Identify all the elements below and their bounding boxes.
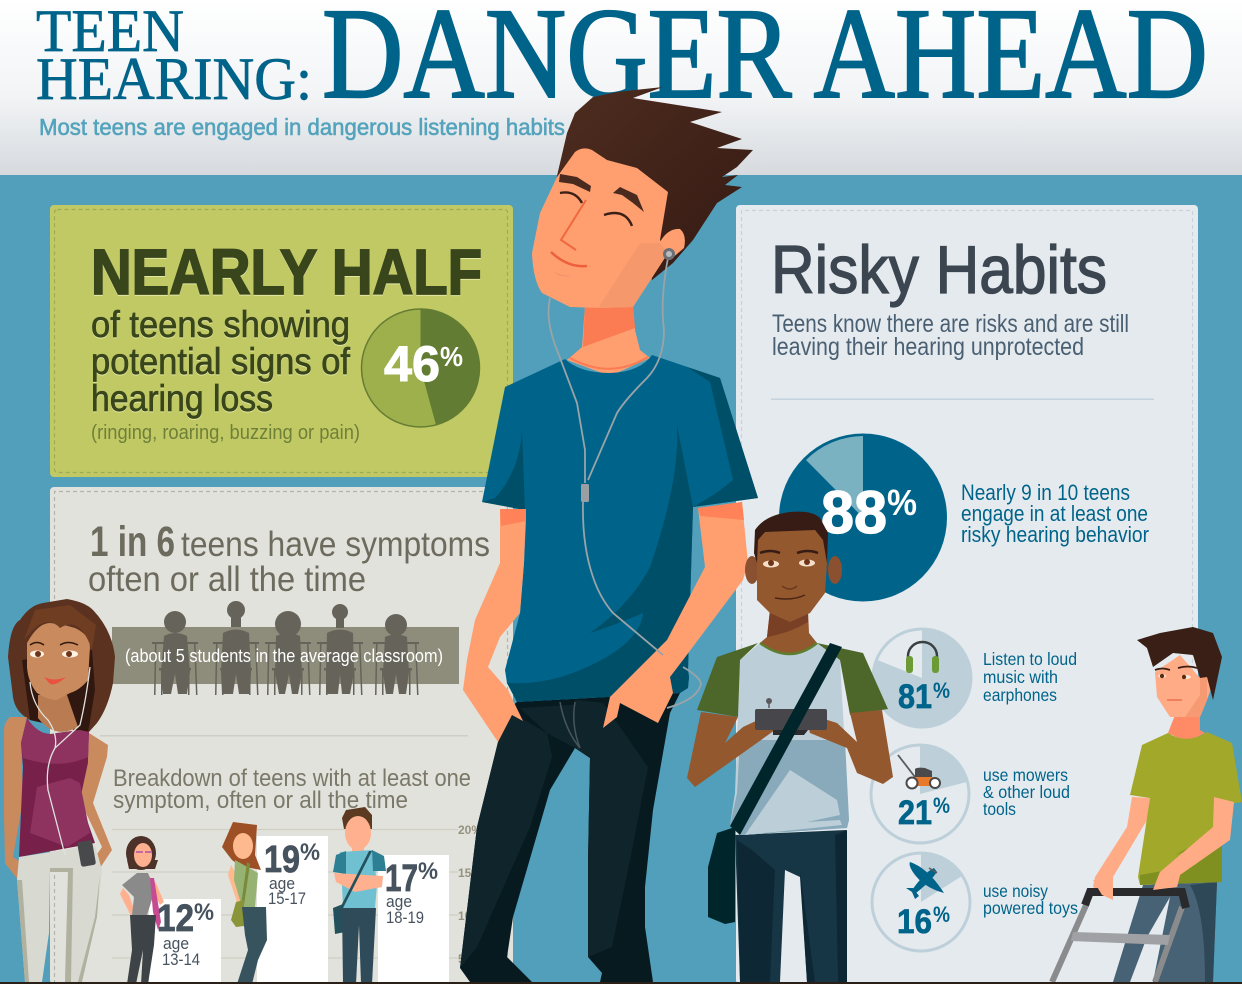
stat: 81 percent earphones: %: [933, 678, 950, 703]
facial features: [551, 174, 644, 276]
purple top: [19, 718, 95, 857]
stat: 81 percent earphones: earphones: [983, 685, 1057, 705]
text: signs of hearing loss: potential signs of: [91, 341, 351, 382]
ears and neck: [745, 556, 759, 584]
label: age 13-14: %: [194, 899, 214, 926]
facial features: [760, 551, 818, 599]
stat: 81 percent earphones: 81: [898, 678, 932, 716]
text: risks intro: [772, 310, 1129, 361]
phone: [77, 840, 96, 867]
text: nearly 9 in 10: Nearly 9 in 10 teens: [961, 480, 1130, 505]
heading: 1 in 6: often or all the time: [88, 560, 366, 599]
pants: [17, 845, 102, 982]
header band: [0, 0, 1242, 175]
text: nearly 9 in 10: risky hearing behavior: [961, 522, 1149, 547]
left arm: [1093, 797, 1150, 900]
text: risks intro: leaving their hearing unprotected: [772, 333, 1084, 361]
bar chart: symptoms by age: 20%: [458, 823, 482, 837]
ear: [660, 229, 685, 260]
panel: 1 in 6 teens: [50, 487, 513, 984]
label: age 18-19: 17: [385, 858, 418, 900]
heading: breakdown: [113, 765, 471, 814]
t-shirt: [730, 643, 849, 835]
stat: 21 percent mowers: %: [933, 793, 950, 818]
pants: [735, 830, 847, 982]
note: symptoms: (ringing, roaring, buzzing or pain): [91, 422, 360, 444]
text: risks intro: Teens know there are risks and are still: [772, 310, 1129, 338]
facial features: [1155, 666, 1197, 700]
stat: 16 percent toys: use noisy: [983, 881, 1048, 901]
t-shirt: [1130, 732, 1242, 885]
label: age 13-14: 13-14: [162, 950, 200, 969]
pie chart: 88 percent: 88: [821, 479, 887, 546]
icon: lawn mower: [898, 755, 940, 788]
stat: 21 percent mowers: tools: [983, 799, 1016, 819]
hair back: [553, 87, 753, 280]
neck: [567, 305, 650, 376]
hair: [1137, 627, 1222, 700]
label: age 15-17: [264, 839, 320, 908]
stat: 21 percent mowers: [871, 745, 1070, 843]
text: signs of hearing loss: [91, 304, 351, 419]
stat: 16 percent toys: powered toys: [983, 898, 1078, 918]
heading: 1 in 6: teens have symptoms: [181, 525, 490, 564]
remote control: [755, 698, 827, 735]
heading: nearly half: NEARLY HALF: [91, 236, 482, 308]
heading: risky habits: Risky Habits: [771, 232, 1107, 308]
label: age 18-19: 18-19: [386, 908, 424, 927]
panel: risky habits: [736, 205, 1198, 984]
bag: [708, 827, 735, 924]
text: signs of hearing loss: hearing loss: [91, 378, 273, 419]
subtitle: Most teens are engaged in dangerous listening habits: [39, 114, 565, 140]
bar chart: symptoms by age: 10: [458, 909, 472, 923]
label: age 18-19: %: [418, 858, 438, 885]
figure: boy with lawn mower: [1052, 627, 1242, 982]
stat: 21 percent mowers: & other loud: [983, 782, 1070, 802]
stat: 16 percent toys: 16: [897, 903, 932, 941]
label: age 13-14: [157, 898, 214, 969]
figure: girl with glasses: [120, 836, 164, 984]
figure: girl with earphones: [4, 599, 115, 982]
pie chart: 46 percent: %: [440, 341, 463, 372]
bottom edge: [0, 982, 1242, 984]
pie chart: 46 percent: 46: [384, 336, 440, 392]
pie chart: 46 percent: [362, 309, 480, 427]
heading: 1 in 6: [88, 518, 490, 599]
text: nearly 9 in 10: [961, 480, 1149, 547]
label: age 18-19: [385, 858, 438, 927]
stat: 16 percent toys: %: [933, 902, 950, 927]
figure: girl with bag: [222, 822, 267, 984]
neck: [1168, 715, 1205, 742]
figure: boy with remote control: [687, 512, 893, 982]
bar chart: symptoms by age: [112, 807, 482, 984]
label: age 13-14: 12: [157, 898, 194, 940]
right arm: [603, 502, 748, 728]
bag strap: [730, 643, 842, 835]
panel: nearly half: [50, 205, 513, 477]
bar chart: symptoms by age: 15: [458, 866, 472, 880]
stat: 81 percent earphones: music with: [983, 667, 1058, 687]
bar chart: symptoms by age: 5: [458, 952, 465, 966]
hair: [754, 512, 828, 563]
mower handle: [1052, 872, 1186, 982]
face: [1155, 655, 1214, 717]
text: nearly 9 in 10: engage in at least one: [961, 501, 1148, 526]
figure: boy arms crossed: [333, 807, 386, 984]
jeans: [460, 693, 680, 982]
icon: seated students: [152, 601, 419, 695]
earphone wire: [30, 667, 90, 855]
neck and face: [38, 695, 78, 732]
t-shirt: [482, 355, 758, 702]
stat: 16 percent toys: [872, 853, 1078, 951]
pie chart: 88 percent: %: [887, 482, 917, 523]
figure: main teen with earphones: [460, 87, 758, 982]
pants: [1113, 882, 1217, 982]
stat: 81 percent earphones: [873, 629, 1077, 727]
label: age 18-19: age: [386, 892, 412, 911]
heading: nearly half: [91, 236, 482, 419]
icon: headphones: [906, 642, 939, 673]
face: [532, 148, 668, 308]
label: age 15-17: age: [269, 874, 295, 893]
face: [757, 530, 827, 622]
right arm: [1153, 797, 1234, 890]
heading: 1 in 6: 1 in 6: [90, 518, 175, 566]
label: age 15-17: %: [300, 839, 320, 866]
sleeves: [697, 643, 758, 717]
classroom band: [112, 601, 459, 695]
pie chart: 88 percent: [779, 434, 947, 602]
text: signs of hearing loss: of teens showing: [91, 304, 350, 345]
icon: toy plane: [906, 862, 944, 899]
arms: [687, 712, 775, 787]
heading: breakdown: symptom, often or all the time: [113, 787, 408, 814]
earphone wire: [549, 258, 668, 655]
heading: breakdown: Breakdown of teens with at least one: [113, 765, 471, 792]
left arm: [463, 509, 526, 742]
arms: [4, 717, 30, 880]
stat: 21 percent mowers: use mowers: [983, 765, 1068, 785]
label: age 15-17: 19: [264, 839, 300, 881]
label: age 15-17: 15-17: [268, 889, 306, 908]
title: HEARING:: [36, 46, 312, 112]
bars: [149, 836, 449, 984]
hair: [8, 599, 115, 733]
stat: 81 percent earphones: Listen to loud: [983, 649, 1077, 669]
caption: average classroom: (about 5 students in the average classroom): [125, 646, 443, 666]
label: age 13-14: age: [163, 934, 189, 953]
stat: 21 percent mowers: 21: [898, 794, 932, 832]
